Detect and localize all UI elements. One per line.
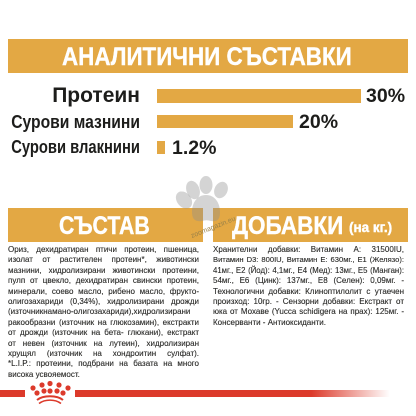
text block: composition: минерали, соево масло, рибено масло, фрукто- [8,287,199,296]
label: crude fibre: Сурови влакнини [11,137,140,157]
text block: composition: хрущял (източник на хондроитин сулфат). [8,349,199,358]
text block: additives: 54мг., Е6 (Цинк): 137мг., Е8 (Селен): 0,09мг. - [213,276,404,285]
icon: watermark paw: zoomagazin.eu [190,216,237,240]
banner: analytical components: АНАЛИТИЧНИ СЪСТАВКИ [62,43,352,71]
text block: additives: Консерванти - Антиоксиданти. [213,318,326,327]
text block: composition: мазнини, хидролизирани животински протеини, [8,266,199,275]
label: crude fat: Сурови мазнини [11,112,140,132]
text block: additives: 41мг., Е2 (Йод): 4,1мг., Е4 (Мед): 13мг., Е5 (Манган): [213,266,404,275]
text block: composition: ракообразни (източник на глюкозамин), екстракти [8,318,199,327]
value: crude fat: 20% [299,111,338,133]
banner: composition: СЪСТАВ [59,212,150,240]
text block: composition: *L.I.P.: протеини, подбрани на базата на много [8,359,199,368]
banner: additives [213,208,408,242]
label: protein: Протеин [52,84,140,107]
icon: watermark paw [176,176,237,240]
red band left [0,390,25,397]
text block: composition: пулп от цвекло, дехидратиран свински протеин, [8,276,199,285]
text block: additives: Хранителни добавки: Витамин А: 31500IU, [213,245,404,254]
bar: crude fibre [157,141,165,154]
banner: analytical components [8,39,408,73]
text block: composition: изолат от растителен протеин*, животински [8,255,199,264]
text block: composition: от дрожди (източник на бета- глюкани), екстракт [8,328,199,337]
logo: royal crown [30,380,71,404]
text block: additives [213,245,404,327]
bar chart: analytical components [11,84,405,159]
red band right with fade [75,390,390,397]
banner: composition [8,208,203,242]
text block: composition: висока усвояемост. [8,370,80,379]
bar: crude fat [157,115,293,128]
text block: additives: юка от Мохаве (Yucca schidigera на прах): 125мг. - [213,307,404,316]
bar: protein [157,89,361,103]
banner: additives: (на кг.) [349,220,392,235]
text block: composition: (източникнамано-олигозахариди),хидролизирани [8,307,190,316]
value: protein: 30% [366,85,405,107]
text block: additives: Технологични добавки: Клиноптилолит с утаечен [213,287,404,296]
value: crude fibre: 1.2% [172,137,216,159]
text block: additives: Витамин D3: 800IU, Витамин Е: 630мг., Е1 (Желязо): [213,255,404,264]
text block: composition: от невен (източник на лутеин), хидролизиран [8,339,199,348]
text block: composition [8,245,199,379]
banner: additives: ДОБАВКИ [232,212,343,240]
text block: composition: Ориз, дехидратиран птичи протеин, пшеница, [8,245,199,254]
text block: additives: произход: 10гр. - Сензорни добавки: Екстракт от [213,297,404,306]
text block: composition: олигозахариди (0,34%), хидролизирани дрожди [8,297,199,306]
